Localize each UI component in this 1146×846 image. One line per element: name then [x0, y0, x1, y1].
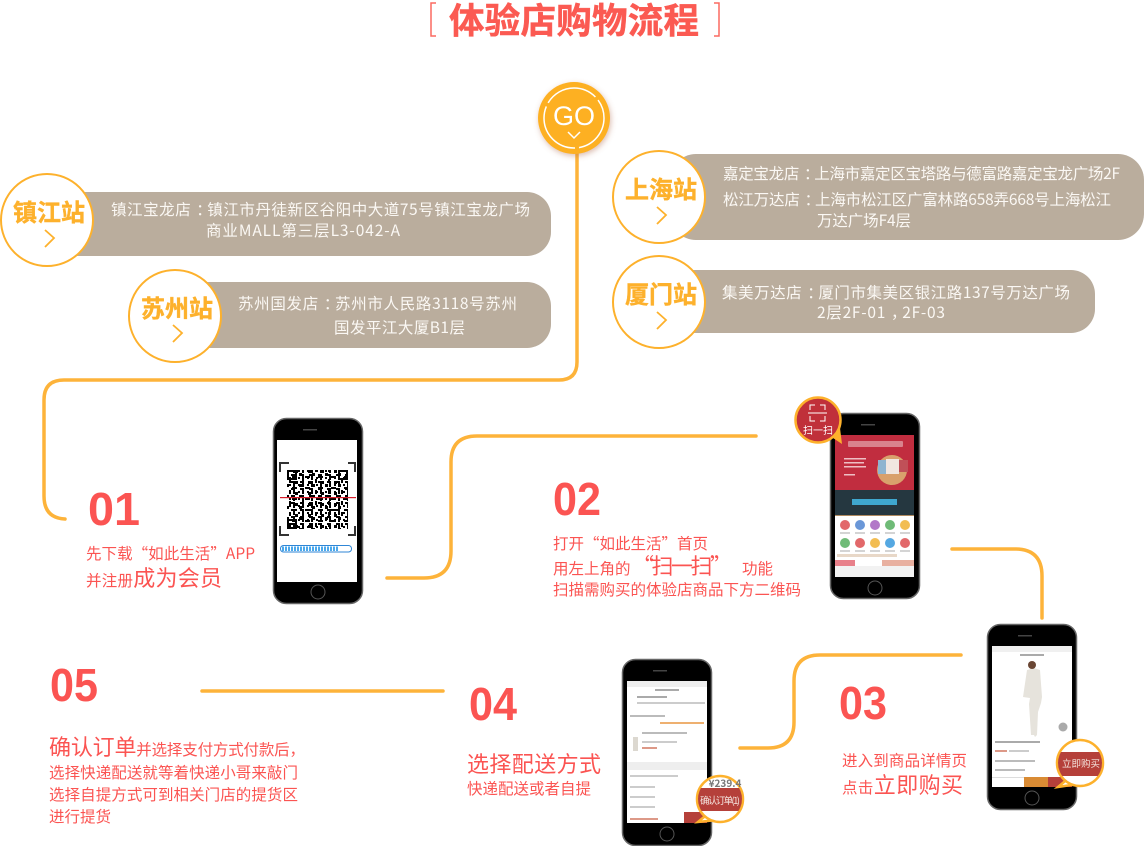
镇江 address: 镇江宝龙店 ：镇江市丹徒新区谷阳中大道75号镇江宝龙广场 — [111, 198, 530, 220]
callout: buy now — [1056, 740, 1104, 787]
上海 badge — [613, 151, 705, 243]
step 05 text: 05 — [50, 659, 98, 711]
苏州 address: 苏州国发店 ：苏州市人民路3118号苏州 — [238, 292, 517, 314]
step 03 text: 点击立即购买 — [842, 768, 963, 800]
step 01 text: 先下载“如此生活”APP — [86, 542, 255, 564]
step 05 text: 进行提货 — [49, 805, 111, 827]
苏州 badge — [129, 270, 221, 362]
step 02 text: 功能 — [742, 557, 773, 579]
step 03 text — [839, 677, 967, 800]
step 05 text — [49, 659, 305, 827]
上海 addresses: 嘉定宝龙店 ：上海市嘉定区宝塔路与德富路嘉定宝龙广场2F — [723, 162, 1120, 184]
step 05 text: 选择快递配送就等着快递小哥来敲门 — [49, 761, 298, 783]
phone: product detail — [988, 624, 1104, 810]
厦门 badge — [613, 256, 705, 348]
phone: QR scan — [274, 418, 362, 604]
厦门 address: 2层2F-01 ，2F-03 — [817, 301, 945, 323]
镇江 address — [111, 198, 530, 241]
phone: confirm order — [622, 660, 744, 846]
GO button: GO — [553, 101, 595, 131]
上海 addresses: 松江万达店 ：上海市松江区广富林路658弄668号上海松江 — [723, 188, 1111, 210]
connector: step 01 to step 02 — [387, 436, 756, 578]
connector: step 02 to step 03 — [952, 549, 1042, 618]
progress bar — [280, 546, 352, 552]
苏州 badge: 苏州站 — [141, 289, 213, 324]
step 02 text — [553, 473, 801, 600]
上海 addresses — [723, 162, 1120, 231]
上海 addresses: 万达广场F4层 — [817, 209, 911, 231]
callout: confirm order — [696, 775, 744, 822]
镇江 badge: 镇江站 — [13, 193, 85, 228]
厦门 address — [722, 281, 1070, 323]
step 03 text: 进入到商品详情页 — [842, 749, 967, 771]
step 02 text: 02 — [553, 473, 601, 525]
step 01 text: 01 — [88, 483, 140, 535]
step 04 text: 04 — [469, 678, 517, 730]
panel: 上海站 — [613, 151, 1144, 243]
苏州 address: 国发平江大厦B1层 — [334, 316, 465, 338]
callout: buy now: 立即购买 — [1062, 756, 1100, 770]
镇江 address: 商业MALL第三层L3-042-A — [206, 219, 401, 241]
panel: 厦门站 — [613, 256, 1095, 348]
step 05 text: 确认订单并选择支付方式付款后， — [49, 730, 305, 762]
connector: GO to step 01 — [44, 150, 577, 519]
panel: 苏州站 — [129, 270, 551, 362]
GO button — [538, 82, 610, 154]
step 03 text: 03 — [839, 677, 887, 729]
step 04 text — [467, 678, 601, 799]
step 04 text: 快递配送或者自提 — [467, 777, 591, 799]
callout: confirm order: 确认订单(1) — [700, 793, 740, 807]
step 02 text: 打开“如此生活”首页 — [553, 532, 708, 554]
step 01 text: 并注册成为会员 — [86, 561, 222, 593]
step 02 text: 扫描需购买的体验店商品下方二维码 — [553, 578, 801, 600]
connector: step 03 to step 04 — [740, 655, 961, 748]
上海 badge: 上海站 — [625, 170, 697, 205]
厦门 badge: 厦门站 — [625, 275, 697, 310]
callout: scan — [796, 398, 842, 444]
苏州 address — [238, 292, 517, 338]
callout: confirm order: ¥239.4 — [709, 775, 741, 790]
connector: step 04 to step 05 — [202, 689, 443, 693]
phone: app home — [796, 398, 920, 598]
step 05 text: 选择自提方式可到相关门店的提货区 — [49, 783, 298, 805]
镇江 badge — [1, 174, 93, 266]
step 02 text: 用左上角的 — [553, 557, 631, 579]
step 02 text: “扫一扫” — [632, 549, 732, 581]
panel: 镇江站 — [1, 174, 551, 266]
QR code — [280, 463, 356, 535]
step 04 text: 选择配送方式 — [467, 747, 601, 779]
厦门 address: 集美万达店 ：厦门市集美区银江路137号万达广场 — [722, 281, 1070, 303]
step 01 text — [86, 483, 255, 593]
callout: scan: 扫一扫 — [803, 422, 833, 437]
